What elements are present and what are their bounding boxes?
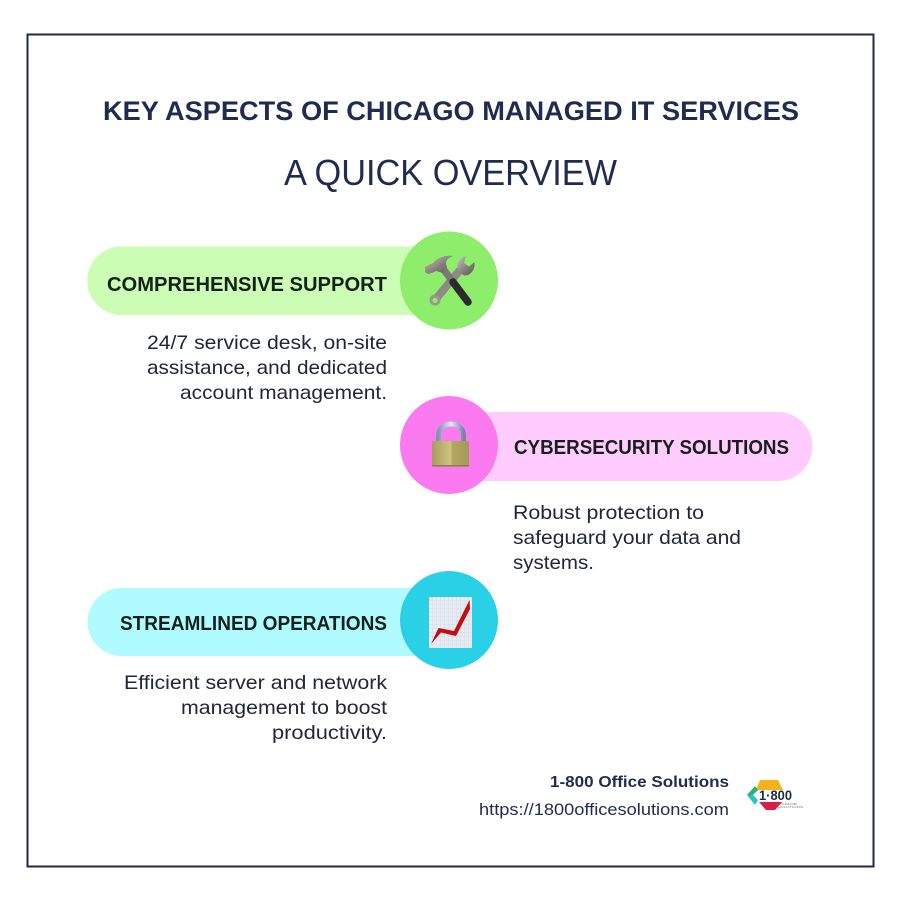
icon badge: rising chart [400, 571, 498, 669]
pill: streamlined operations [88, 588, 449, 656]
pill: comprehensive support [87, 246, 449, 315]
footer url: https://1800officesolutions.com [479, 800, 729, 819]
text block: cybersecurity solutions [513, 502, 741, 574]
title: KEY ASPECTS OF CHICAGO MANAGED IT SERVICES [103, 96, 799, 126]
text block: streamlined operations: management to boost [181, 697, 388, 719]
icon badge: hammer and wrench [400, 232, 498, 330]
logo: 1-800 Office Solutions [747, 780, 803, 810]
pill: cybersecurity solutions [449, 412, 813, 481]
heading: cybersecurity solutions: CYBERSECURITY SOLUTIONS [514, 437, 789, 459]
logo: 1-800 Office Solutions: SOLUTIONS [777, 805, 803, 809]
panel: streamlined operations [88, 571, 498, 669]
subtitle: A QUICK OVERVIEW [284, 152, 617, 193]
text block: streamlined operations: productivity. [272, 722, 387, 744]
text block: comprehensive support [147, 332, 387, 404]
panel: comprehensive support [87, 232, 498, 330]
text block: cybersecurity solutions: Robust protection to [513, 502, 704, 524]
text block: comprehensive support: 24/7 service desk, on-site [147, 332, 387, 354]
logo: 1-800 Office Solutions: 1·800 [759, 788, 792, 803]
heading: streamlined operations: STREAMLINED OPERATIONS [120, 613, 387, 635]
text block: streamlined operations [124, 672, 388, 744]
text block: comprehensive support: assistance, and dedicated [147, 357, 387, 379]
footer company name: 1-800 Office Solutions [550, 774, 729, 791]
text block: comprehensive support: account management. [180, 382, 387, 404]
heading: comprehensive support: COMPREHENSIVE SUPPORT [107, 274, 387, 296]
text block: cybersecurity solutions: systems. [513, 552, 594, 574]
logo: 1-800 Office Solutions: OFFICE [777, 802, 797, 806]
text block: cybersecurity solutions: safeguard your data and [513, 527, 741, 549]
panel: cybersecurity solutions [400, 396, 813, 494]
icon badge: padlock [400, 396, 498, 494]
text block: streamlined operations: Efficient server and network [124, 672, 387, 694]
